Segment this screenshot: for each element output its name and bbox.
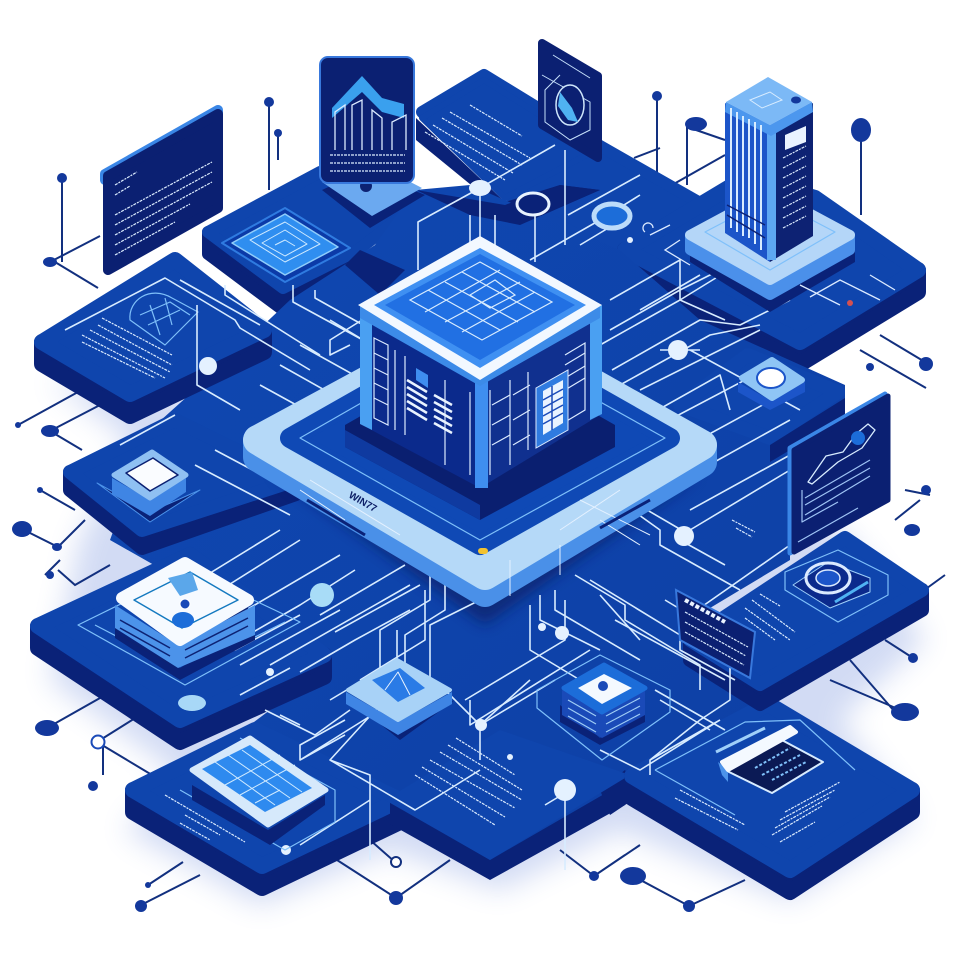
plinth xyxy=(345,348,615,520)
platform: right xyxy=(690,538,922,704)
outline icon xyxy=(130,293,198,345)
text block xyxy=(745,594,795,640)
central building xyxy=(345,236,615,520)
circuit traces xyxy=(120,145,800,870)
panel: left billboard xyxy=(105,110,218,270)
central chip base xyxy=(258,320,702,596)
server racks xyxy=(374,338,585,475)
panel: top small xyxy=(542,43,598,158)
rack door xyxy=(536,370,568,448)
tower base xyxy=(690,192,855,312)
text block xyxy=(415,738,522,825)
panel: right billboard xyxy=(790,394,888,553)
panel: right small text xyxy=(676,590,755,678)
platform: bottom centre xyxy=(385,730,630,880)
chip: centre bottom right xyxy=(537,655,670,760)
tablet: bottom left xyxy=(165,738,335,850)
text block xyxy=(425,105,530,180)
corner strip xyxy=(475,378,488,488)
central circuit field xyxy=(110,185,845,865)
device: right concentric xyxy=(785,550,888,622)
panel: top chart xyxy=(320,57,414,183)
chip: centre bottom left xyxy=(346,660,455,740)
platform: top right xyxy=(625,178,918,364)
platform: mid right step xyxy=(680,355,845,462)
roof blueprint xyxy=(410,262,552,340)
platform: bottom right xyxy=(632,704,912,892)
tower side circuit xyxy=(643,223,895,306)
tower xyxy=(725,77,813,262)
chip: left mid xyxy=(97,452,200,522)
base label: WIN77 xyxy=(346,490,379,515)
text block xyxy=(675,782,840,842)
left wall xyxy=(362,310,480,488)
platform: top centre xyxy=(416,75,730,260)
shadow under central base xyxy=(270,470,700,625)
text block xyxy=(82,318,172,378)
drop shadow xyxy=(50,380,925,905)
chip: bottom right card xyxy=(655,720,855,815)
platform: top left xyxy=(208,172,410,310)
roof rim xyxy=(360,305,600,386)
platform: bottom left xyxy=(133,730,400,888)
stepped shadows xyxy=(345,185,640,815)
chip: right mid xyxy=(738,360,805,410)
ring node xyxy=(517,193,630,228)
chart panel stand xyxy=(322,160,425,228)
server: lower left xyxy=(78,563,300,711)
right wall xyxy=(480,310,600,488)
circuit nodes xyxy=(199,180,694,855)
chip: top left xyxy=(222,208,350,282)
small text near right xyxy=(732,520,755,537)
platform: left xyxy=(42,260,310,416)
platform: lower left xyxy=(38,555,324,742)
platform: mid left xyxy=(70,420,296,548)
